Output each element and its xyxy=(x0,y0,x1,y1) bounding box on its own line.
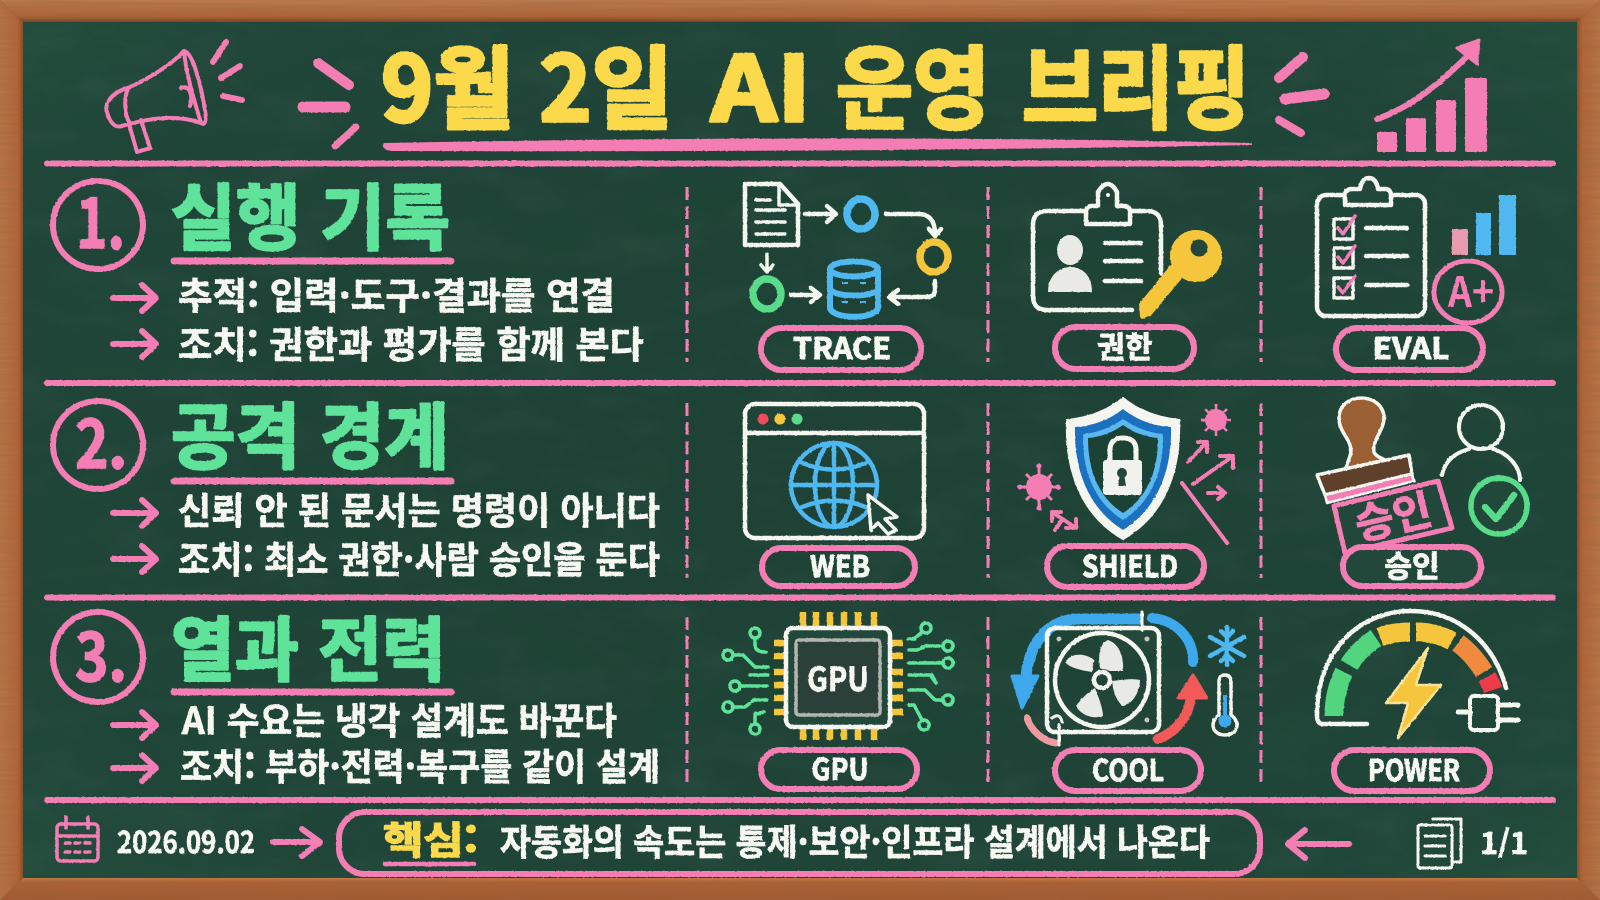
pill: POWER: POWER xyxy=(1368,746,1460,790)
icon: approval stamp: 승인 xyxy=(1348,476,1437,553)
message: 자동화의 속도는 통제·보안·인프라 설계에서 나온다 xyxy=(500,814,1210,866)
icon: snowflake xyxy=(1210,627,1244,665)
title: AI xyxy=(710,17,811,147)
number badge 3 xyxy=(53,605,143,702)
heading underline xyxy=(174,478,451,484)
icon: ID badge and key xyxy=(1033,184,1222,316)
icon: megaphone xyxy=(106,42,242,152)
icon: virus right xyxy=(1201,404,1231,436)
icon: thermometer xyxy=(1213,675,1237,735)
bullet 2: 조치: 권한과 평가를 함께 본다 xyxy=(178,315,644,369)
pill: 권한 xyxy=(1055,323,1194,369)
heading underline xyxy=(174,688,451,696)
pill: EVAL xyxy=(1336,324,1483,370)
bullet 1: 추적: 입력·도구·결과를 연결 xyxy=(178,266,615,320)
callout: key takeaway xyxy=(339,810,1260,874)
page number: 1/1 xyxy=(1480,819,1528,863)
title: 브리핑 xyxy=(1022,17,1250,147)
label underline xyxy=(385,862,474,866)
pill: GPU: GPU xyxy=(812,745,868,789)
pill: SHIELD: SHIELD xyxy=(1082,542,1178,586)
icon: trace flow xyxy=(745,184,948,317)
pill: COOL: COOL xyxy=(1092,746,1164,790)
title: 9월 2일 xyxy=(381,17,673,147)
panel: TRACE xyxy=(745,184,948,370)
pill: SHIELD xyxy=(1047,542,1204,587)
pill: EVAL: EVAL xyxy=(1372,324,1450,368)
panel: GPU xyxy=(723,612,953,789)
icon: clipboard and score: A+ xyxy=(1447,259,1494,320)
date: 2026.09.02 xyxy=(117,818,255,862)
icon: GPU chip xyxy=(723,612,953,740)
pill: WEB xyxy=(762,542,915,586)
heading: 실행 기록: 실행 기록 xyxy=(171,160,450,265)
number badge 2 xyxy=(53,392,143,489)
icon: rising bar chart xyxy=(1377,40,1487,152)
pill: TRACE: TRACE xyxy=(793,324,891,368)
bullet 1: 신뢰 안 된 문서는 명령이 아니다 xyxy=(178,481,660,535)
pill: 승인: 승인 xyxy=(1384,542,1440,586)
left burst xyxy=(303,63,356,146)
panel: SHIELD xyxy=(1018,398,1233,587)
dividers xyxy=(47,164,1553,800)
bullet 2: 조치: 부하·전력·복구를 같이 설계 xyxy=(180,737,660,791)
panel: EVAL xyxy=(1317,178,1516,370)
pill: WEB: WEB xyxy=(810,542,870,586)
panel: 권한 xyxy=(1033,184,1222,369)
icon: approval stamp xyxy=(1317,398,1527,553)
arrow left xyxy=(1288,830,1349,858)
icon: shield with lock xyxy=(1067,398,1179,539)
icon: pages xyxy=(1418,819,1461,868)
pill: POWER xyxy=(1334,746,1490,791)
icon: power gauge xyxy=(1317,611,1518,738)
panel: 승인 xyxy=(1317,398,1527,586)
pill: TRACE xyxy=(761,324,921,370)
title: 운영 xyxy=(836,17,990,147)
pill: 권한: 권한 xyxy=(1097,323,1153,367)
icon: virus left xyxy=(1018,464,1060,510)
panel: section 1 text xyxy=(53,160,644,369)
right burst xyxy=(1279,57,1324,133)
icon: clipboard and score xyxy=(1317,178,1516,323)
header xyxy=(106,17,1487,152)
heading underline xyxy=(174,258,451,264)
pill: COOL xyxy=(1055,746,1201,791)
panel: COOL xyxy=(1012,612,1244,791)
pill: GPU xyxy=(761,745,917,789)
number badge 1 xyxy=(53,169,143,269)
panel: WEB xyxy=(745,404,924,586)
title underline xyxy=(384,140,1252,150)
label: 핵심: 핵심: xyxy=(383,810,478,865)
number badge 3: 3. xyxy=(75,605,127,701)
number badge 1: 1. xyxy=(76,169,125,268)
heading: 공격 경계: 공격 경계 xyxy=(171,379,449,484)
panel: section 2 text xyxy=(53,379,660,584)
attack arrows xyxy=(1052,442,1233,543)
number badge 2: 2. xyxy=(75,392,127,488)
arrow right xyxy=(273,829,320,856)
icon: calendar xyxy=(57,817,98,861)
bullet 1: AI 수요는 냉각 설계도 바꾼다 xyxy=(181,691,617,745)
icon: GPU chip: GPU xyxy=(807,653,869,701)
pill: 승인 xyxy=(1343,542,1481,586)
bullet 2: 조치: 최소 권한·사람 승인을 둔다 xyxy=(178,530,660,584)
heading: 열과 전력: 열과 전력 xyxy=(171,595,446,696)
panel: POWER xyxy=(1317,611,1518,791)
icon: cooling fan xyxy=(1012,612,1244,745)
footer bar xyxy=(57,810,1528,874)
panel: section 3 text xyxy=(53,595,660,791)
icon: browser with globe xyxy=(745,404,924,538)
